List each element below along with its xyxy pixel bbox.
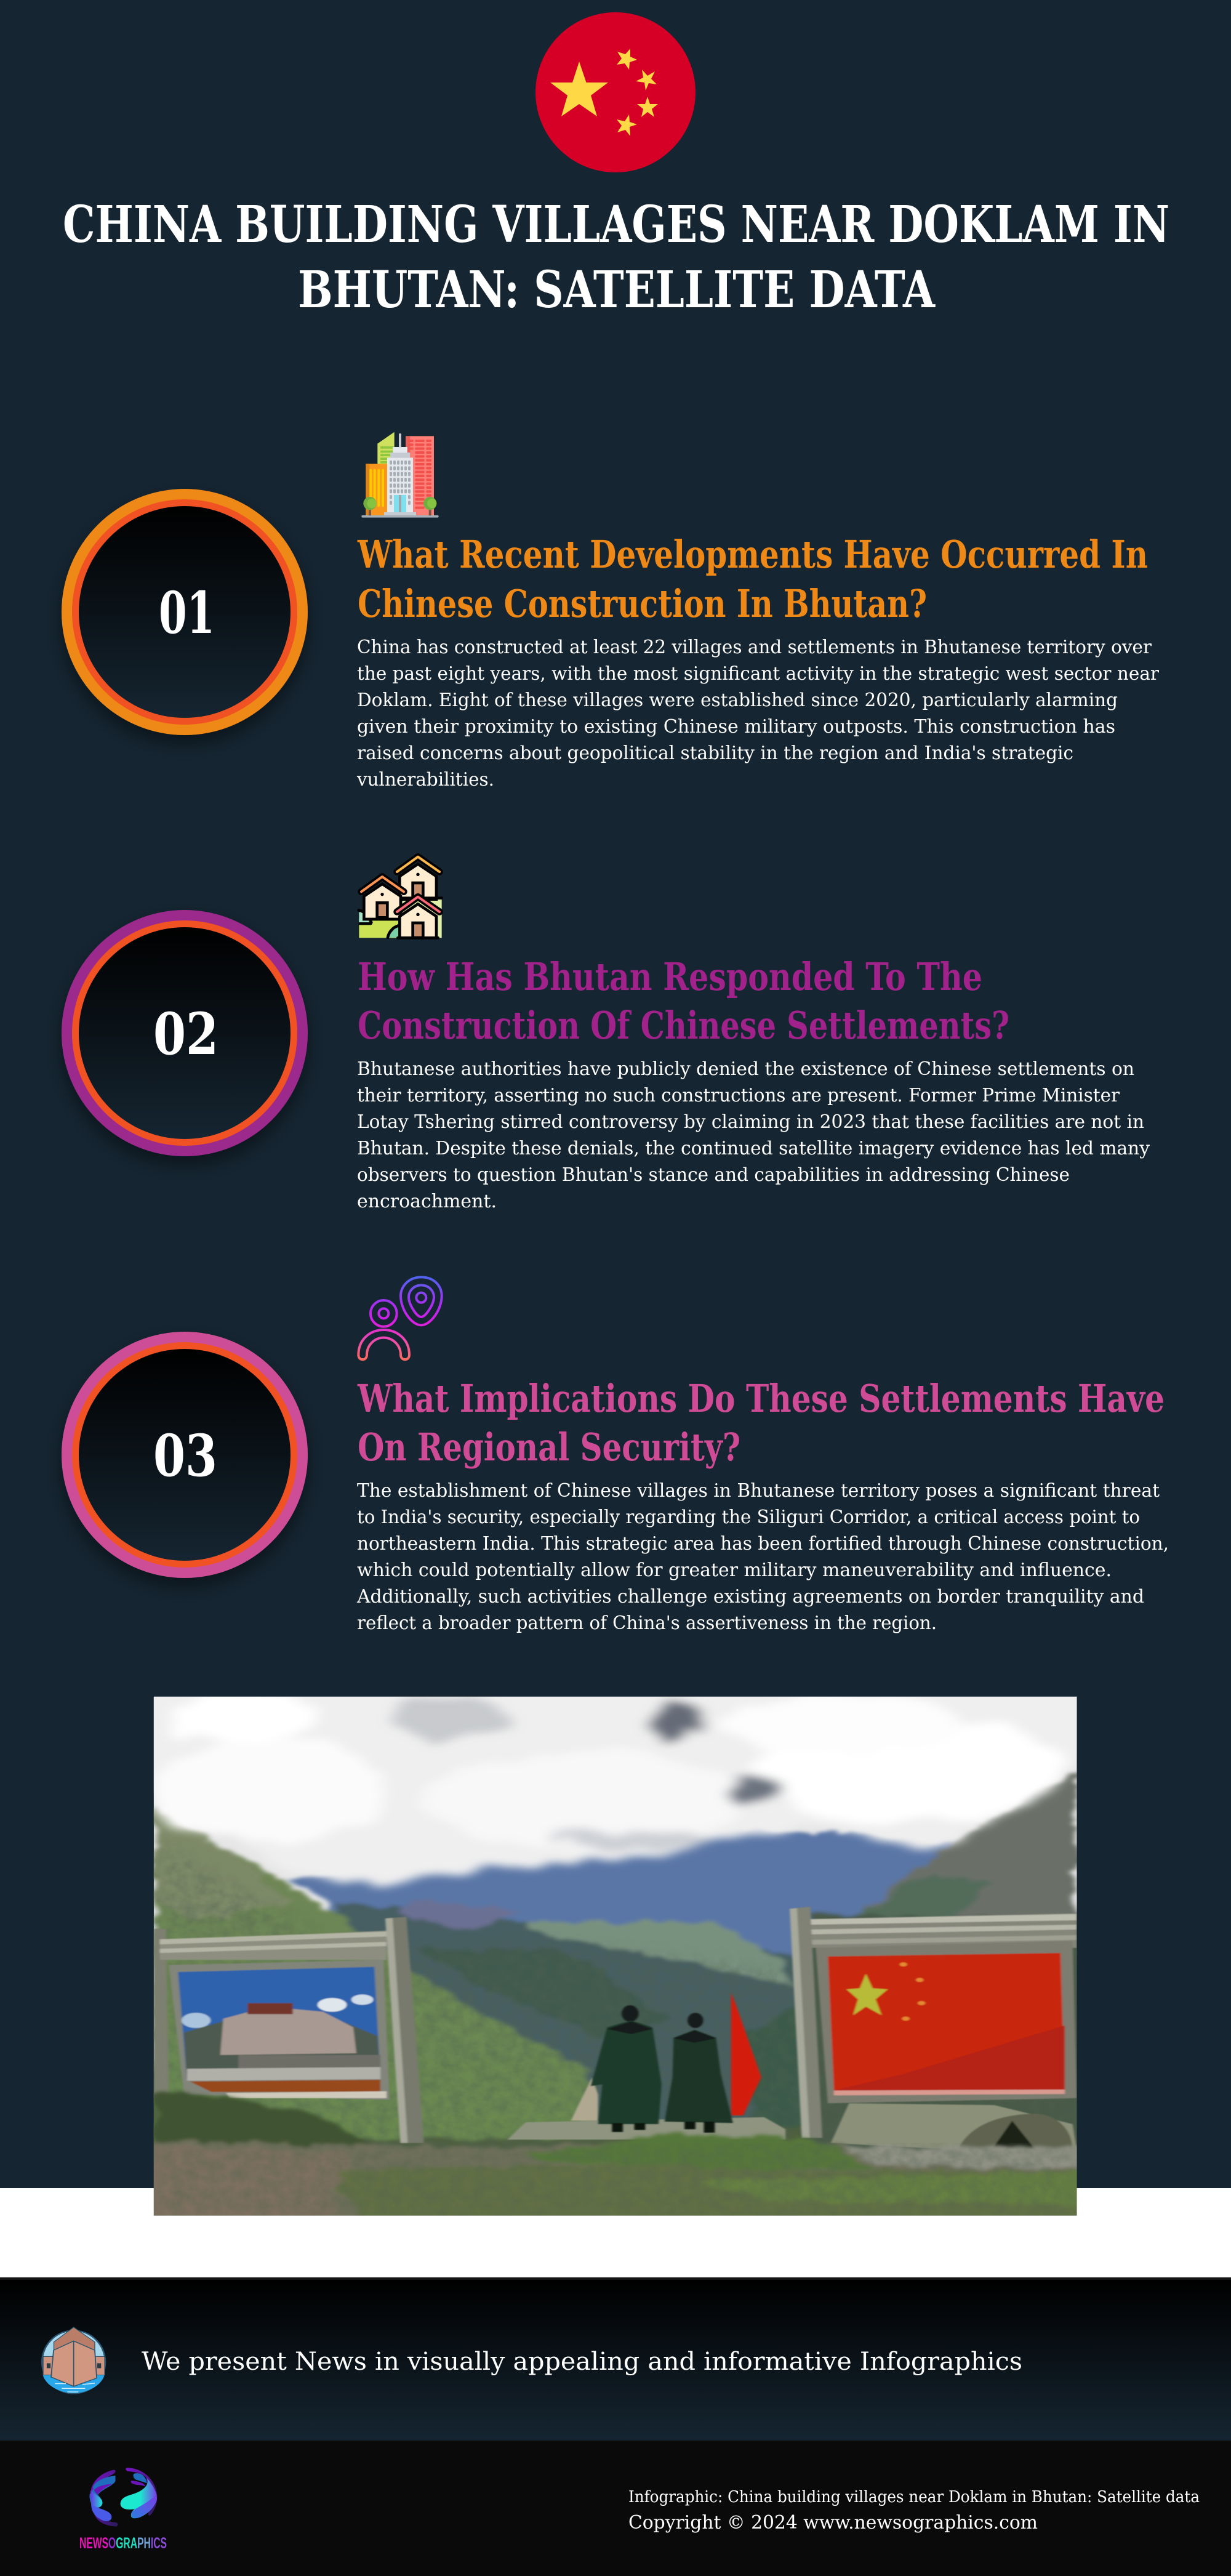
icon: location pins and person xyxy=(358,1277,442,1359)
tents xyxy=(507,2077,1077,2151)
text block: section 2: Lotay Tshering stirred controversy by claiming in 2023 that these facilities are not in xyxy=(357,1111,1144,1132)
text block: section 2: their territory, asserting no such constructions are present. Former Prime Minister xyxy=(357,1085,1120,1106)
photo: soldiers at the border xyxy=(154,1697,1077,2216)
text block: section 3: Additionally, such activities challenge existing agreements on border tranquility and xyxy=(356,1586,1144,1607)
credit text xyxy=(628,2488,1200,2534)
heading: section 1 xyxy=(357,532,1148,626)
heading: section 2: Construction Of Chinese Settlements? xyxy=(358,1003,1009,1048)
number badge 02: 02 xyxy=(153,1000,219,1068)
number badge 03: 03 xyxy=(153,1422,217,1490)
text block: section 1 xyxy=(356,637,1160,790)
left board xyxy=(154,1917,424,2143)
texture xyxy=(154,1852,799,2139)
text block: section 1: raised concerns about geopolitical stability in the region and India's strategic xyxy=(357,743,1073,763)
text block: section 2: Bhutan. Despite these denials, the continued satellite imagery evidence has led many xyxy=(357,1138,1150,1159)
heading: section 1: Chinese Construction In Bhutan? xyxy=(358,581,927,626)
heading: section 3: On Regional Security? xyxy=(358,1425,740,1470)
number badge 01: 01 xyxy=(159,579,215,647)
text block: section 2: encroachment. xyxy=(357,1191,497,1212)
credit text: Copyright © 2024 www.newsographics.com xyxy=(628,2512,1038,2534)
icon: houses xyxy=(359,857,443,940)
text block: section 3: reflect a broader pattern of China's assertiveness in the region. xyxy=(357,1612,937,1633)
text block: section 3: to India's security, especially regarding the Siliguri Corridor, a critical access point to xyxy=(357,1507,1140,1527)
icon: fortress xyxy=(42,2327,105,2394)
number badge 02 xyxy=(62,910,308,1156)
logo: Newsographics xyxy=(79,2468,167,2552)
clouds xyxy=(154,1697,1077,1893)
text block: section 1: the past eight years, with the most significant activity in the strategic west sector near xyxy=(357,663,1160,684)
text block: section 1: given their proximity to existing Chinese military outposts. This construction has xyxy=(357,716,1115,737)
heading: section 2: How Has Bhutan Responded To The xyxy=(358,954,982,999)
footer xyxy=(0,2441,1231,2576)
footer banner xyxy=(0,2277,1231,2441)
logo: Newsographics: NEWSOGRAPHICS xyxy=(79,2535,167,2552)
title xyxy=(63,195,1169,320)
number badge 01 xyxy=(62,489,308,735)
title: BHUTAN: SATELLITE DATA xyxy=(298,260,936,320)
text block: section 3: The establishment of Chinese villages in Bhutanese territory poses a significant threat xyxy=(357,1480,1160,1501)
red flag xyxy=(731,1993,761,2115)
text block: section 3: which could potentially allow for greater military maneuverability and influence. xyxy=(357,1560,1112,1580)
tagline: We present News in visually appealing and informative Infographics xyxy=(142,2348,1022,2376)
text block: section 3 xyxy=(356,1480,1169,1633)
text block: section 1: Doklam. Eight of these villages were established since 2020, particularly alarming xyxy=(357,690,1118,710)
right board xyxy=(790,1907,1077,2138)
credit text: Infographic: China building villages near Doklam in Bhutan: Satellite data xyxy=(628,2488,1200,2506)
text block: section 2: Bhutanese authorities have publicly denied the existence of Chinese settlements on xyxy=(357,1058,1134,1079)
text block: section 3: northeastern India. This strategic area has been fortified through Chinese construction, xyxy=(357,1533,1169,1554)
text block: section 1: vulnerabilities. xyxy=(356,769,494,790)
text block: section 2: observers to question Bhutan's stance and capabilities in addressing Chinese xyxy=(357,1164,1070,1185)
soldiers xyxy=(591,2005,733,2133)
heading: section 2 xyxy=(358,954,1009,1048)
icon: city buildings xyxy=(361,432,439,518)
white band xyxy=(0,2188,1231,2277)
far mountains and hills xyxy=(154,1770,1091,2150)
icon: China flag xyxy=(535,12,696,172)
heading: section 3 xyxy=(357,1376,1165,1470)
text block: section 2 xyxy=(357,1058,1150,1212)
number badge 03 xyxy=(62,1332,308,1578)
text block: section 1: China has constructed at least 22 villages and settlements in Bhutanese territory over xyxy=(357,637,1152,658)
foreground xyxy=(135,2093,1091,2226)
